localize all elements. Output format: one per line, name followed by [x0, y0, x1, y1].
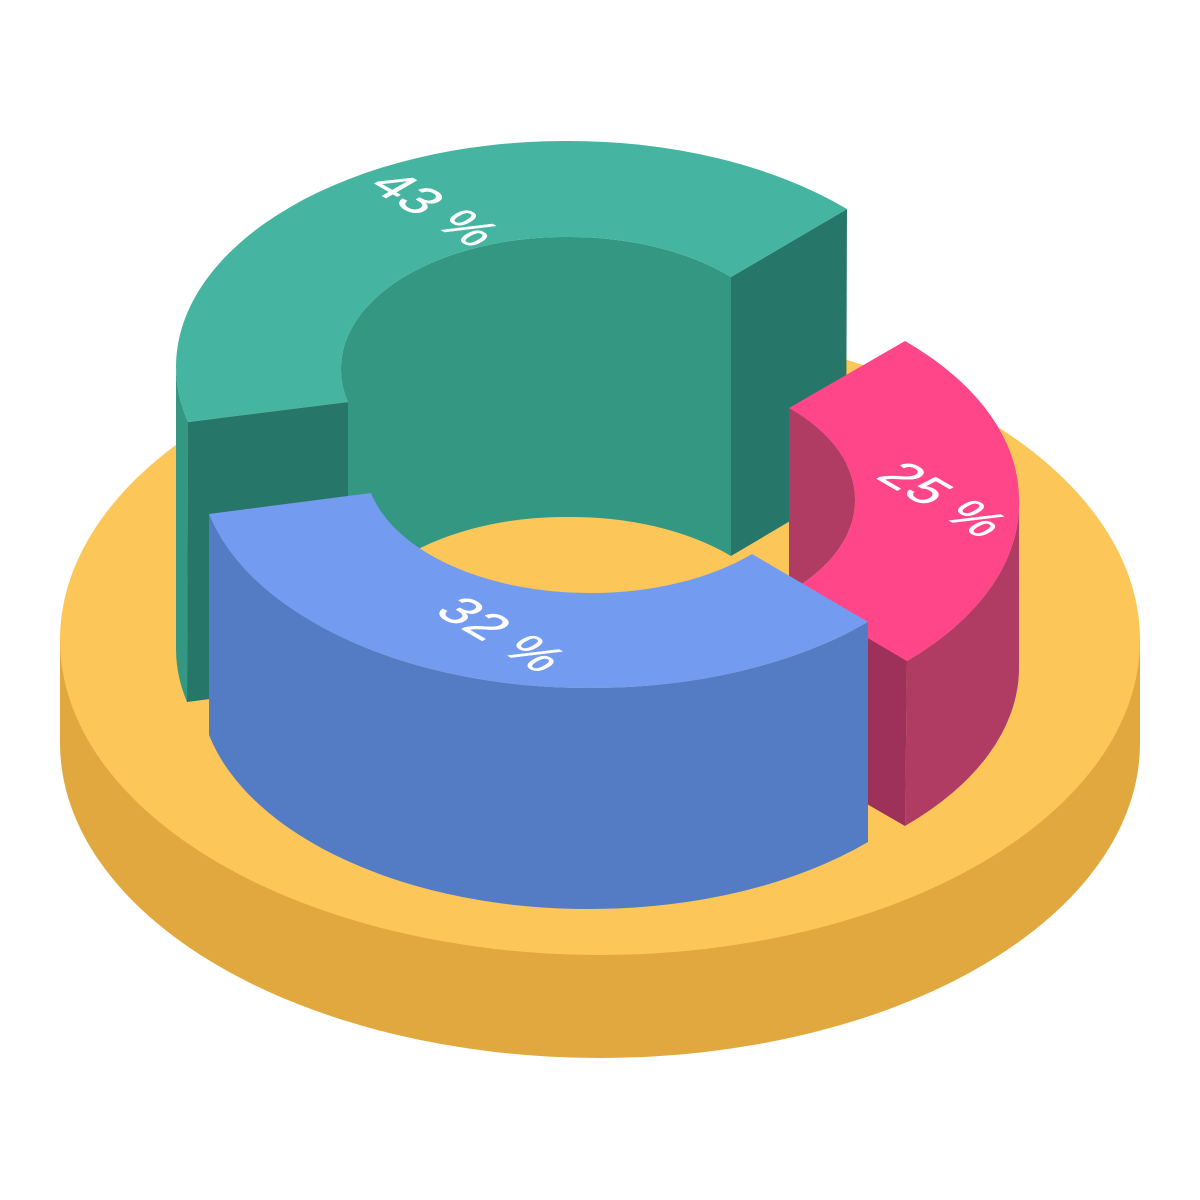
label: 25 %: 25 %	[864, 454, 1022, 546]
base disc	[60, 325, 1140, 1058]
segment: green 43 percent	[176, 141, 847, 702]
segment: blue 32 percent	[209, 493, 868, 909]
label: 32 %: 32 %	[423, 589, 581, 681]
label: 43 %: 43 %	[356, 164, 514, 255]
segment: pink 25 percent	[789, 341, 1022, 826]
